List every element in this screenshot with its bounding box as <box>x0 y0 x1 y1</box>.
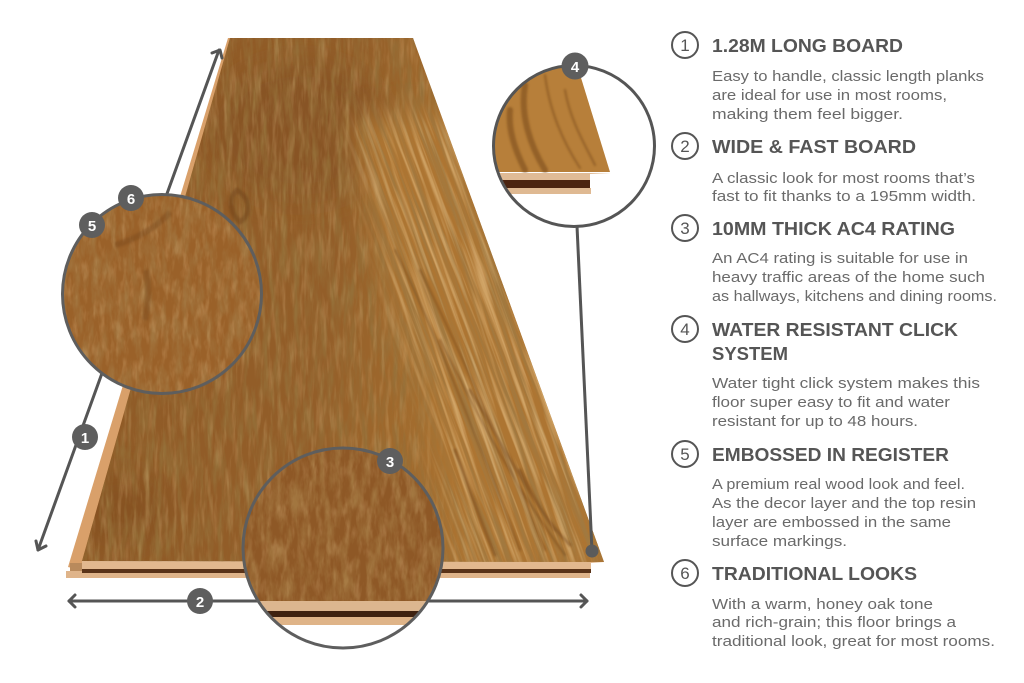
feature 3: thickness and rating <box>672 215 997 305</box>
board left edge strip <box>68 38 233 570</box>
description 5: layer are embossed in the same <box>712 514 951 531</box>
marker 3: 3 <box>386 454 394 471</box>
heading 4: SYSTEM <box>712 344 788 364</box>
description 1: making them feel bigger. <box>712 106 903 123</box>
description 2 <box>712 170 976 205</box>
heading 5: EMBOSSED IN REGISTER <box>712 445 949 465</box>
feature 5: embossed <box>672 441 976 550</box>
number 3: 3 <box>680 219 690 238</box>
number 1: 1 <box>680 36 690 55</box>
magnifier: board thickness <box>240 445 446 648</box>
board lower edge <box>66 561 604 578</box>
description 4 <box>712 375 980 430</box>
number 5: 5 <box>680 445 690 464</box>
marker 6 <box>118 185 144 211</box>
number 4: 4 <box>680 320 690 339</box>
feature 2: wide board <box>672 133 976 205</box>
marker 2 <box>187 588 213 614</box>
description 2: fast to fit thanks to a 195mm width. <box>712 188 976 205</box>
description 1: Easy to handle, classic length planks <box>712 68 984 85</box>
number 2: 2 <box>680 137 690 156</box>
description 3: An AC4 rating is suitable for use in <box>712 250 968 267</box>
description 6: and rich-grain; this floor brings a <box>712 614 957 631</box>
description 5 <box>712 476 976 550</box>
marker 4: 4 <box>571 59 580 76</box>
number 6: 6 <box>680 564 690 583</box>
feature 1: long board <box>672 32 984 123</box>
description 3: as hallways, kitchens and dining rooms. <box>712 288 997 305</box>
feature 4: click system <box>672 316 980 430</box>
description 2: A classic look for most rooms that’s <box>712 170 975 187</box>
arrow: board width <box>69 595 587 607</box>
description 5: A premium real wood look and feel. <box>712 476 965 493</box>
marker 2: 2 <box>196 594 204 611</box>
marker 5 <box>79 212 105 238</box>
feature 6: traditional looks <box>672 560 995 650</box>
marker 5: 5 <box>88 218 96 235</box>
description 1 <box>712 68 984 123</box>
heading 2: WIDE & FAST BOARD <box>712 137 916 157</box>
description 4: floor super easy to fit and water <box>712 394 950 411</box>
description 5: As the decor layer and the top resin <box>712 495 976 512</box>
description 1: are ideal for use in most rooms, <box>712 87 947 104</box>
magnifier: embossed surface <box>60 190 265 400</box>
description 4: Water tight click system makes this <box>712 375 980 392</box>
number 5 <box>672 441 698 467</box>
number 6 <box>672 560 698 586</box>
marker 4 <box>562 52 588 80</box>
arrow: board length <box>36 50 222 550</box>
marker 1: 1 <box>81 430 89 447</box>
description 6 <box>712 596 995 650</box>
description 6: With a warm, honey oak tone <box>712 596 933 613</box>
number 2 <box>672 133 698 159</box>
description 3 <box>712 250 997 305</box>
marker 6: 6 <box>127 191 135 208</box>
magnifier: click system <box>480 60 654 226</box>
number 3 <box>672 215 698 241</box>
heading 4 <box>712 320 958 364</box>
description 5: surface markings. <box>712 533 847 550</box>
heading 6: TRADITIONAL LOOKS <box>712 564 917 584</box>
marker 3 <box>377 448 403 474</box>
number 4 <box>672 316 698 342</box>
heading 4: WATER RESISTANT CLICK <box>712 320 958 340</box>
marker 1 <box>72 424 98 450</box>
heading 3: 10MM THICK AC4 RATING <box>712 219 955 239</box>
description 6: traditional look, great for most rooms. <box>712 633 995 650</box>
heading 1: 1.28M LONG BOARD <box>712 36 903 56</box>
laminate board <box>66 38 604 578</box>
board top surface <box>82 38 604 562</box>
description 4: resistant for up to 48 hours. <box>712 413 918 430</box>
number 1 <box>672 32 698 58</box>
leader line from click system to board corner <box>577 226 598 558</box>
description 3: heavy traffic areas of the home such <box>712 269 985 286</box>
